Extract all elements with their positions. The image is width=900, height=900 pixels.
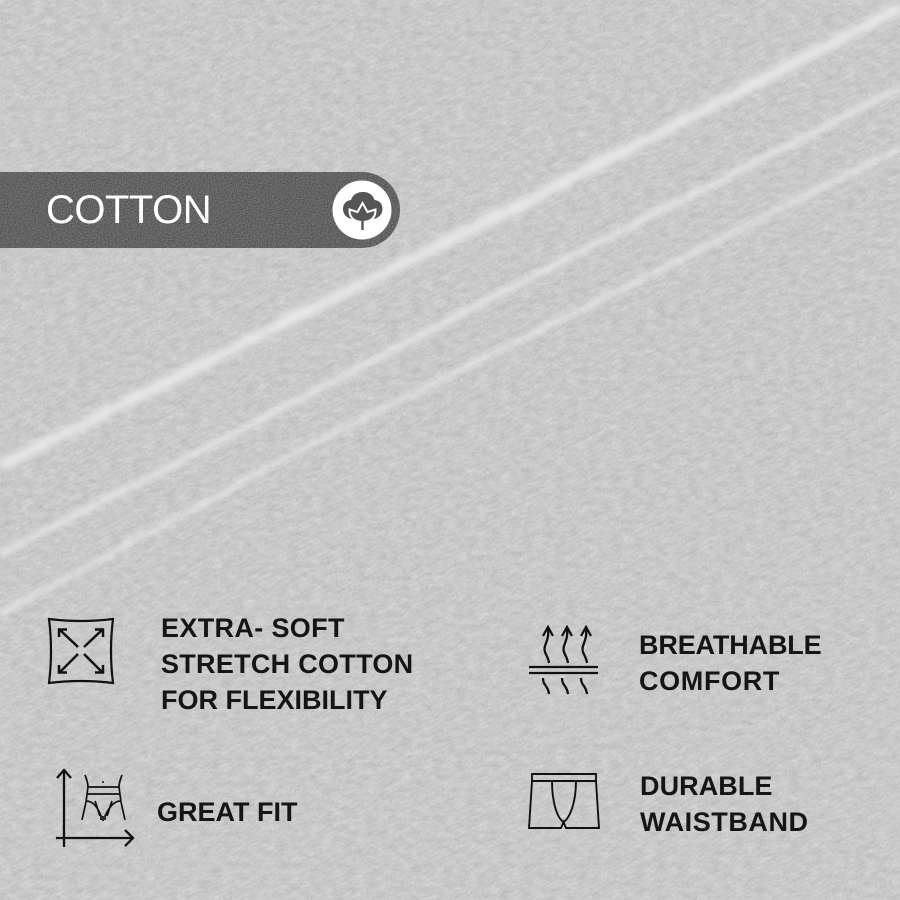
- banner: cotton label: [0, 172, 400, 248]
- feature: great fit: [56, 768, 298, 847]
- feature text: WAISTBAND: [640, 807, 809, 837]
- feature: durable waistband: [528, 771, 809, 837]
- banner shape: [0, 172, 400, 248]
- banner title: COTTON: [46, 188, 211, 232]
- feature text: FOR FLEXIBILITY: [161, 685, 388, 715]
- feature: breathable comfort: [529, 625, 822, 696]
- icon: breathable layers: [529, 625, 598, 694]
- feature text: BREATHABLE: [639, 630, 822, 660]
- feature text: GREAT FIT: [157, 797, 297, 827]
- feature: extra-soft stretch cotton: [48, 613, 413, 715]
- feature text: [640, 771, 809, 837]
- icon: cotton boll: [332, 180, 392, 240]
- feature text: [639, 630, 822, 696]
- feature text: EXTRA- SOFT: [161, 613, 345, 643]
- icon: stretch square: [48, 618, 114, 684]
- icon: boxer briefs: [528, 773, 600, 829]
- feature text: COMFORT: [639, 666, 780, 696]
- feature text: STRETCH COTTON: [161, 649, 413, 679]
- feature text: [161, 613, 413, 715]
- feature text: DURABLE: [640, 771, 772, 801]
- icon: fit chart with briefs: [56, 768, 134, 847]
